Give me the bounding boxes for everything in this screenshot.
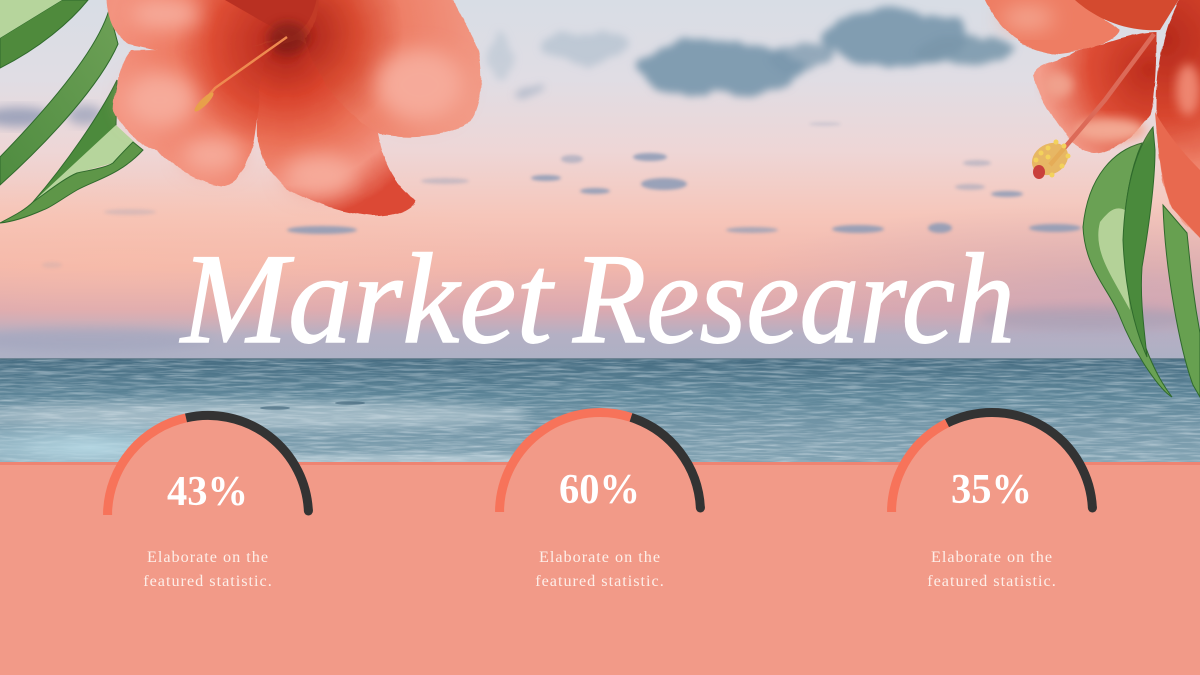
title [179, 227, 1015, 370]
leaves right [1083, 127, 1200, 397]
bottom coral panel [0, 462, 1200, 675]
gauge 60% [500, 412, 705, 512]
watercolor highlights [124, 0, 464, 195]
flower centre base [240, 0, 330, 110]
caption 1: featured statistic. [143, 572, 273, 590]
stamen [1050, 34, 1154, 165]
gauge 35% [892, 412, 1097, 512]
clouds [0, 10, 1200, 352]
value 60%: 60% [559, 467, 640, 513]
dark leaf [1123, 127, 1155, 357]
big leaf highlight [1098, 208, 1130, 310]
value 35%: 35% [951, 467, 1032, 513]
hibiscus flower top right [980, 0, 1200, 240]
lower left petal [113, 38, 287, 186]
sky background [0, 0, 1200, 360]
right petal [305, 0, 481, 137]
caption 2: featured statistic. [535, 572, 665, 590]
hibiscus flower top left [107, 0, 481, 216]
value 43%: 43% [167, 469, 248, 515]
bottom petal [257, 40, 416, 216]
stamen [196, 37, 287, 110]
anther cluster [1026, 137, 1074, 181]
caption 3: featured statistic. [927, 572, 1057, 590]
upper left petal [107, 0, 285, 53]
caption 1: Elaborate on the [147, 548, 269, 566]
stat 1: 43% [108, 415, 313, 590]
stat 3: 35% [892, 412, 1097, 590]
title: Market [179, 227, 555, 370]
title: Research [572, 227, 1015, 370]
palm leaves top left [0, 0, 143, 223]
central petal [1033, 32, 1157, 153]
caption 2: Elaborate on the [539, 548, 661, 566]
stat 2: 60% [500, 412, 705, 590]
top centre petal [225, 0, 318, 36]
right large petal [1156, 0, 1200, 240]
upper petal [980, 0, 1120, 54]
sea [0, 358, 1200, 478]
big leaf [1083, 143, 1172, 397]
gauge 43% [108, 415, 313, 516]
caption 3: Elaborate on the [931, 548, 1053, 566]
far right leaf [1163, 205, 1200, 397]
